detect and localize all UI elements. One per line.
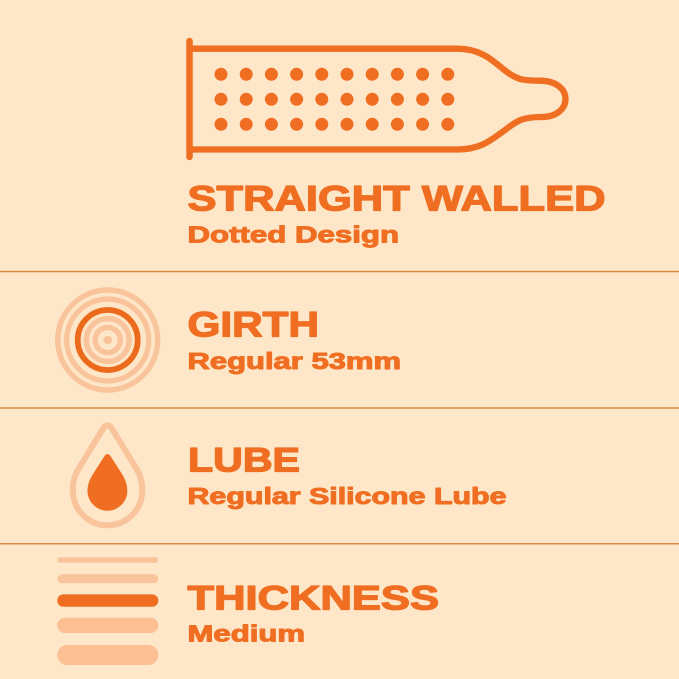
- icon: dotted condom outline: [190, 41, 566, 157]
- text: medium: Medium: [188, 621, 305, 647]
- icon: thickness bars: [57, 557, 158, 665]
- icon: girth concentric rings: [58, 290, 158, 390]
- heading: lube: LUBE: [188, 442, 300, 480]
- heading: thickness: THICKNESS: [188, 579, 439, 617]
- icon: lube drop: [73, 426, 142, 525]
- text: regular silicone lube: Regular Silicone Lube: [188, 483, 506, 509]
- heading: straight walled: STRAIGHT WALLED: [188, 180, 606, 218]
- text: dotted design: Dotted Design: [188, 222, 399, 248]
- text: regular 53mm: Regular 53mm: [188, 348, 401, 374]
- heading: girth: GIRTH: [188, 306, 319, 344]
